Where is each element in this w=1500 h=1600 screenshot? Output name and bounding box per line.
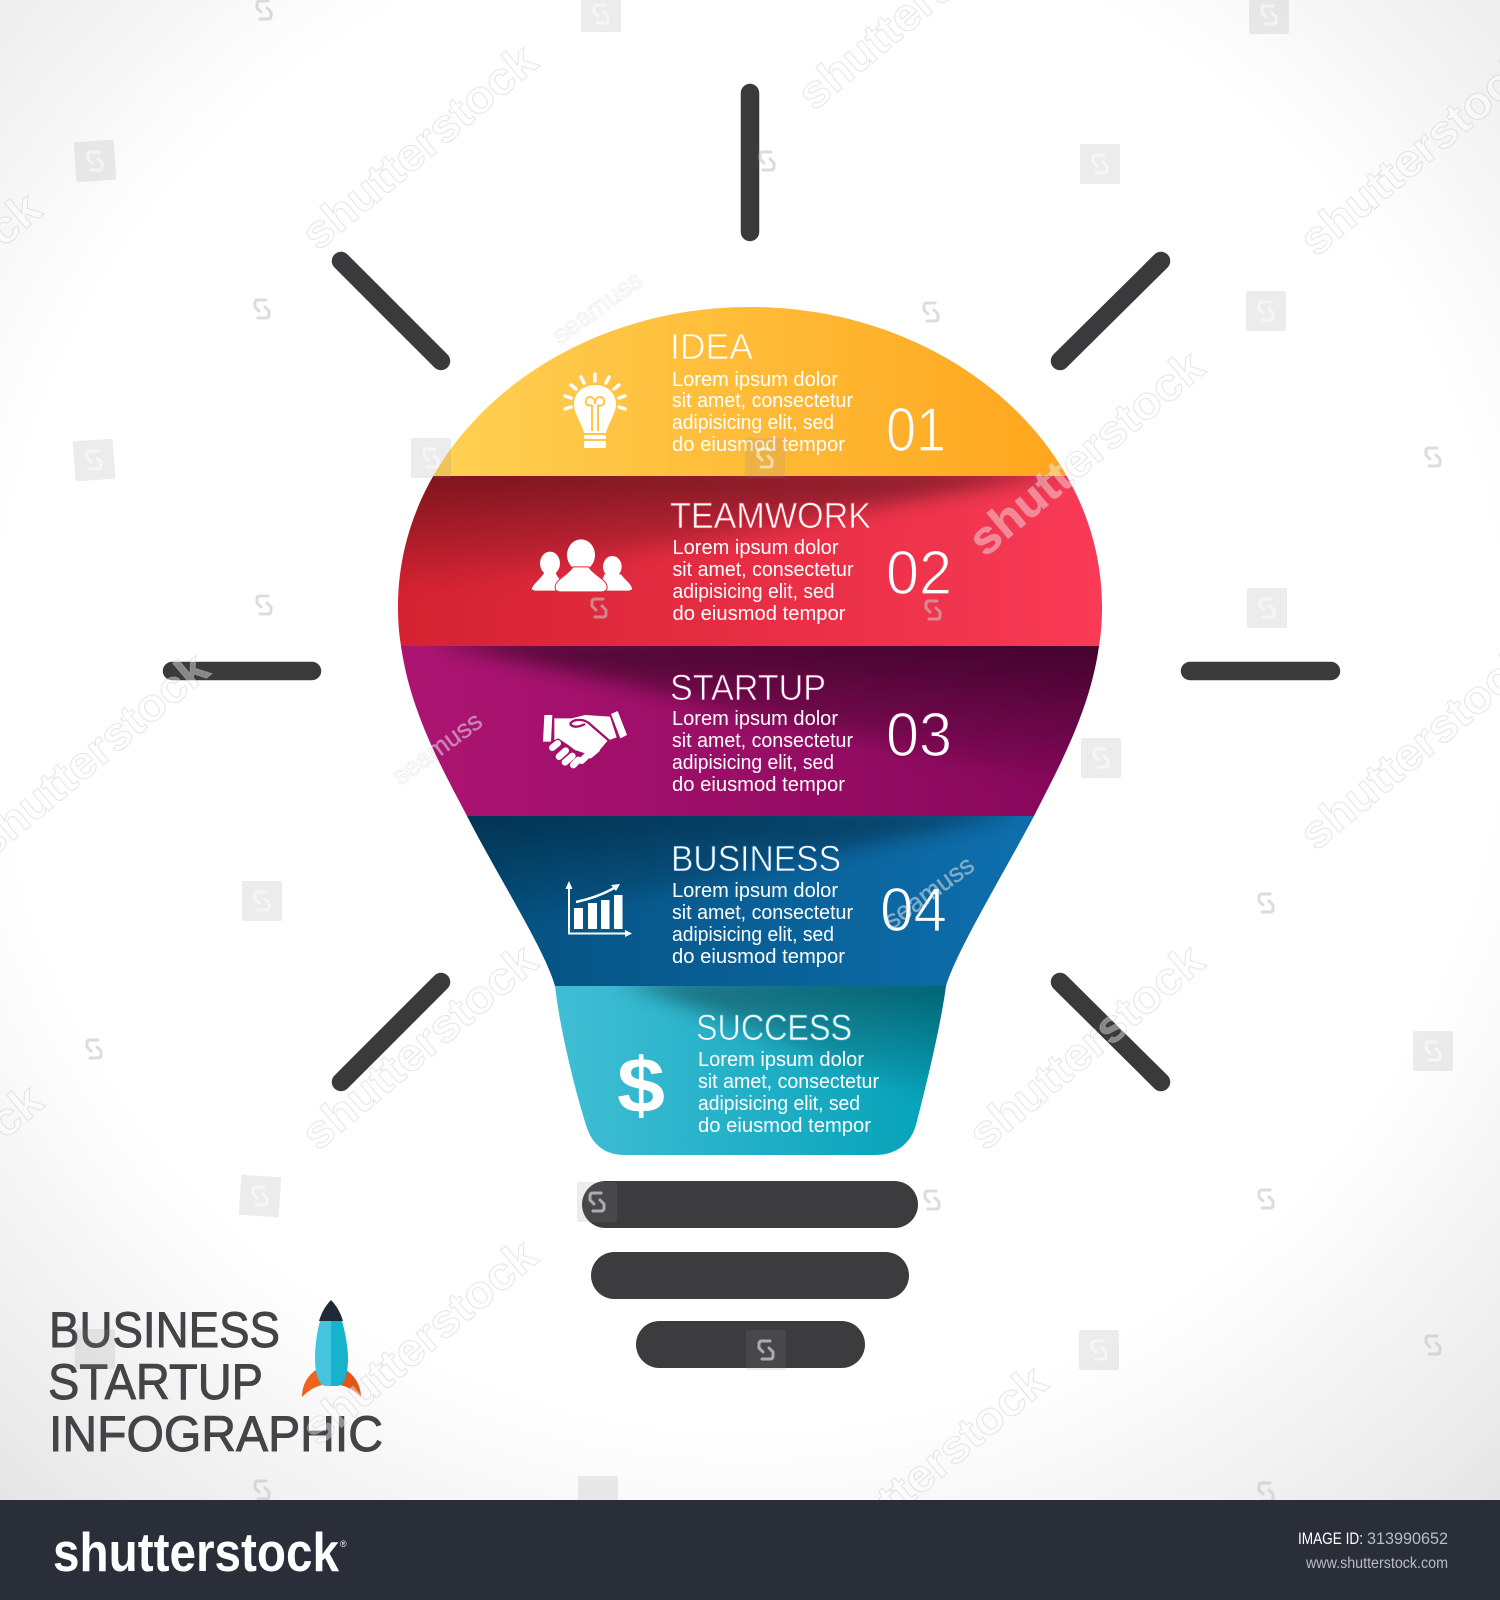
- watermark marks: shutterstock: [291, 33, 547, 260]
- watermark marks: seamuss: [878, 849, 980, 935]
- number 03: 03: [886, 701, 952, 770]
- number 04: 04: [880, 876, 947, 945]
- watermark marks: seamuss: [386, 705, 488, 791]
- heading: idea: IDEA: [670, 326, 753, 367]
- text block: idea: adipisicing elit, sed: [672, 412, 834, 434]
- title: [48, 1302, 383, 1462]
- text block: teamwork: do eiusmod tempor: [672, 603, 846, 625]
- text block: teamwork: Lorem ipsum dolor: [672, 537, 839, 559]
- text block: teamwork: adipisicing elit, sed: [672, 581, 834, 603]
- title: INFOGRAPHIC: [49, 1406, 383, 1462]
- band 5: success: [617, 1007, 879, 1137]
- number 02: 02: [886, 539, 952, 608]
- registered mark: ®: [340, 1539, 347, 1549]
- footer url: www.shutterstock.com: [1305, 1555, 1448, 1572]
- watermark marks: shutterstock: [958, 933, 1214, 1160]
- icon: handshake: [543, 711, 627, 765]
- heading: success: SUCCESS: [696, 1007, 852, 1048]
- text block: success: do eiusmod tempor: [698, 1115, 871, 1137]
- band 1: idea: [565, 326, 946, 465]
- image number: 313990652: [1367, 1530, 1448, 1548]
- watermark marks: shutterstock: [958, 339, 1214, 566]
- title: BUSINESS: [49, 1302, 280, 1358]
- watermark marks: shutterstock: [291, 933, 547, 1160]
- text block: idea: do eiusmod tempor: [672, 434, 845, 456]
- footer logo: shutterstock: [53, 1521, 339, 1583]
- text block: startup: sit amet, consectetur: [672, 730, 853, 752]
- text block: business: do eiusmod tempor: [672, 946, 845, 968]
- text block: teamwork: sit amet, consectetur: [672, 559, 854, 581]
- icon: people: [532, 539, 632, 591]
- text block: idea: [672, 369, 853, 456]
- text block: teamwork: [672, 537, 854, 625]
- image id: IMAGE ID:: [1298, 1530, 1363, 1548]
- text block: startup: do eiusmod tempor: [672, 774, 845, 796]
- watermark marks: shutterstock: [801, 1354, 1057, 1581]
- icon: light bulb: [565, 374, 625, 448]
- text block: success: adipisicing elit, sed: [698, 1093, 860, 1115]
- text block: idea: Lorem ipsum dolor: [672, 369, 838, 391]
- light rays: [172, 93, 1331, 1082]
- heading: business: BUSINESS: [671, 838, 841, 879]
- text block: success: sit amet, consectetur: [698, 1071, 879, 1093]
- footer bar: [0, 1500, 1500, 1600]
- text block: startup: Lorem ipsum dolor: [672, 708, 838, 730]
- band 3: startup: [543, 667, 952, 796]
- heading: startup: STARTUP: [670, 667, 826, 708]
- lamp base: [582, 1181, 918, 1368]
- icon: growth chart: [566, 881, 632, 937]
- band 4: business: [566, 838, 947, 968]
- watermark marks: seamuss: [546, 264, 648, 350]
- text block: business: Lorem ipsum dolor: [672, 880, 838, 902]
- text block: success: [698, 1049, 879, 1137]
- panel: bulb bands: [370, 300, 1130, 1161]
- icon: dollar: $: [617, 1041, 665, 1129]
- watermark marks: shutterstock: [291, 1228, 547, 1455]
- text block: success: Lorem ipsum dolor: [698, 1049, 864, 1071]
- text block: startup: [672, 708, 853, 796]
- text block: startup: adipisicing elit, sed: [672, 752, 834, 774]
- number 01: 01: [886, 396, 946, 465]
- text block: business: adipisicing elit, sed: [672, 924, 834, 946]
- title: STARTUP: [48, 1354, 263, 1410]
- icon: rocket: [302, 1300, 361, 1397]
- text block: business: [672, 880, 853, 968]
- band 2: teamwork: [532, 495, 952, 625]
- text block: business: sit amet, consectetur: [672, 902, 853, 924]
- heading: teamwork: TEAMWORK: [670, 495, 871, 536]
- text block: idea: sit amet, consectetur: [672, 390, 853, 412]
